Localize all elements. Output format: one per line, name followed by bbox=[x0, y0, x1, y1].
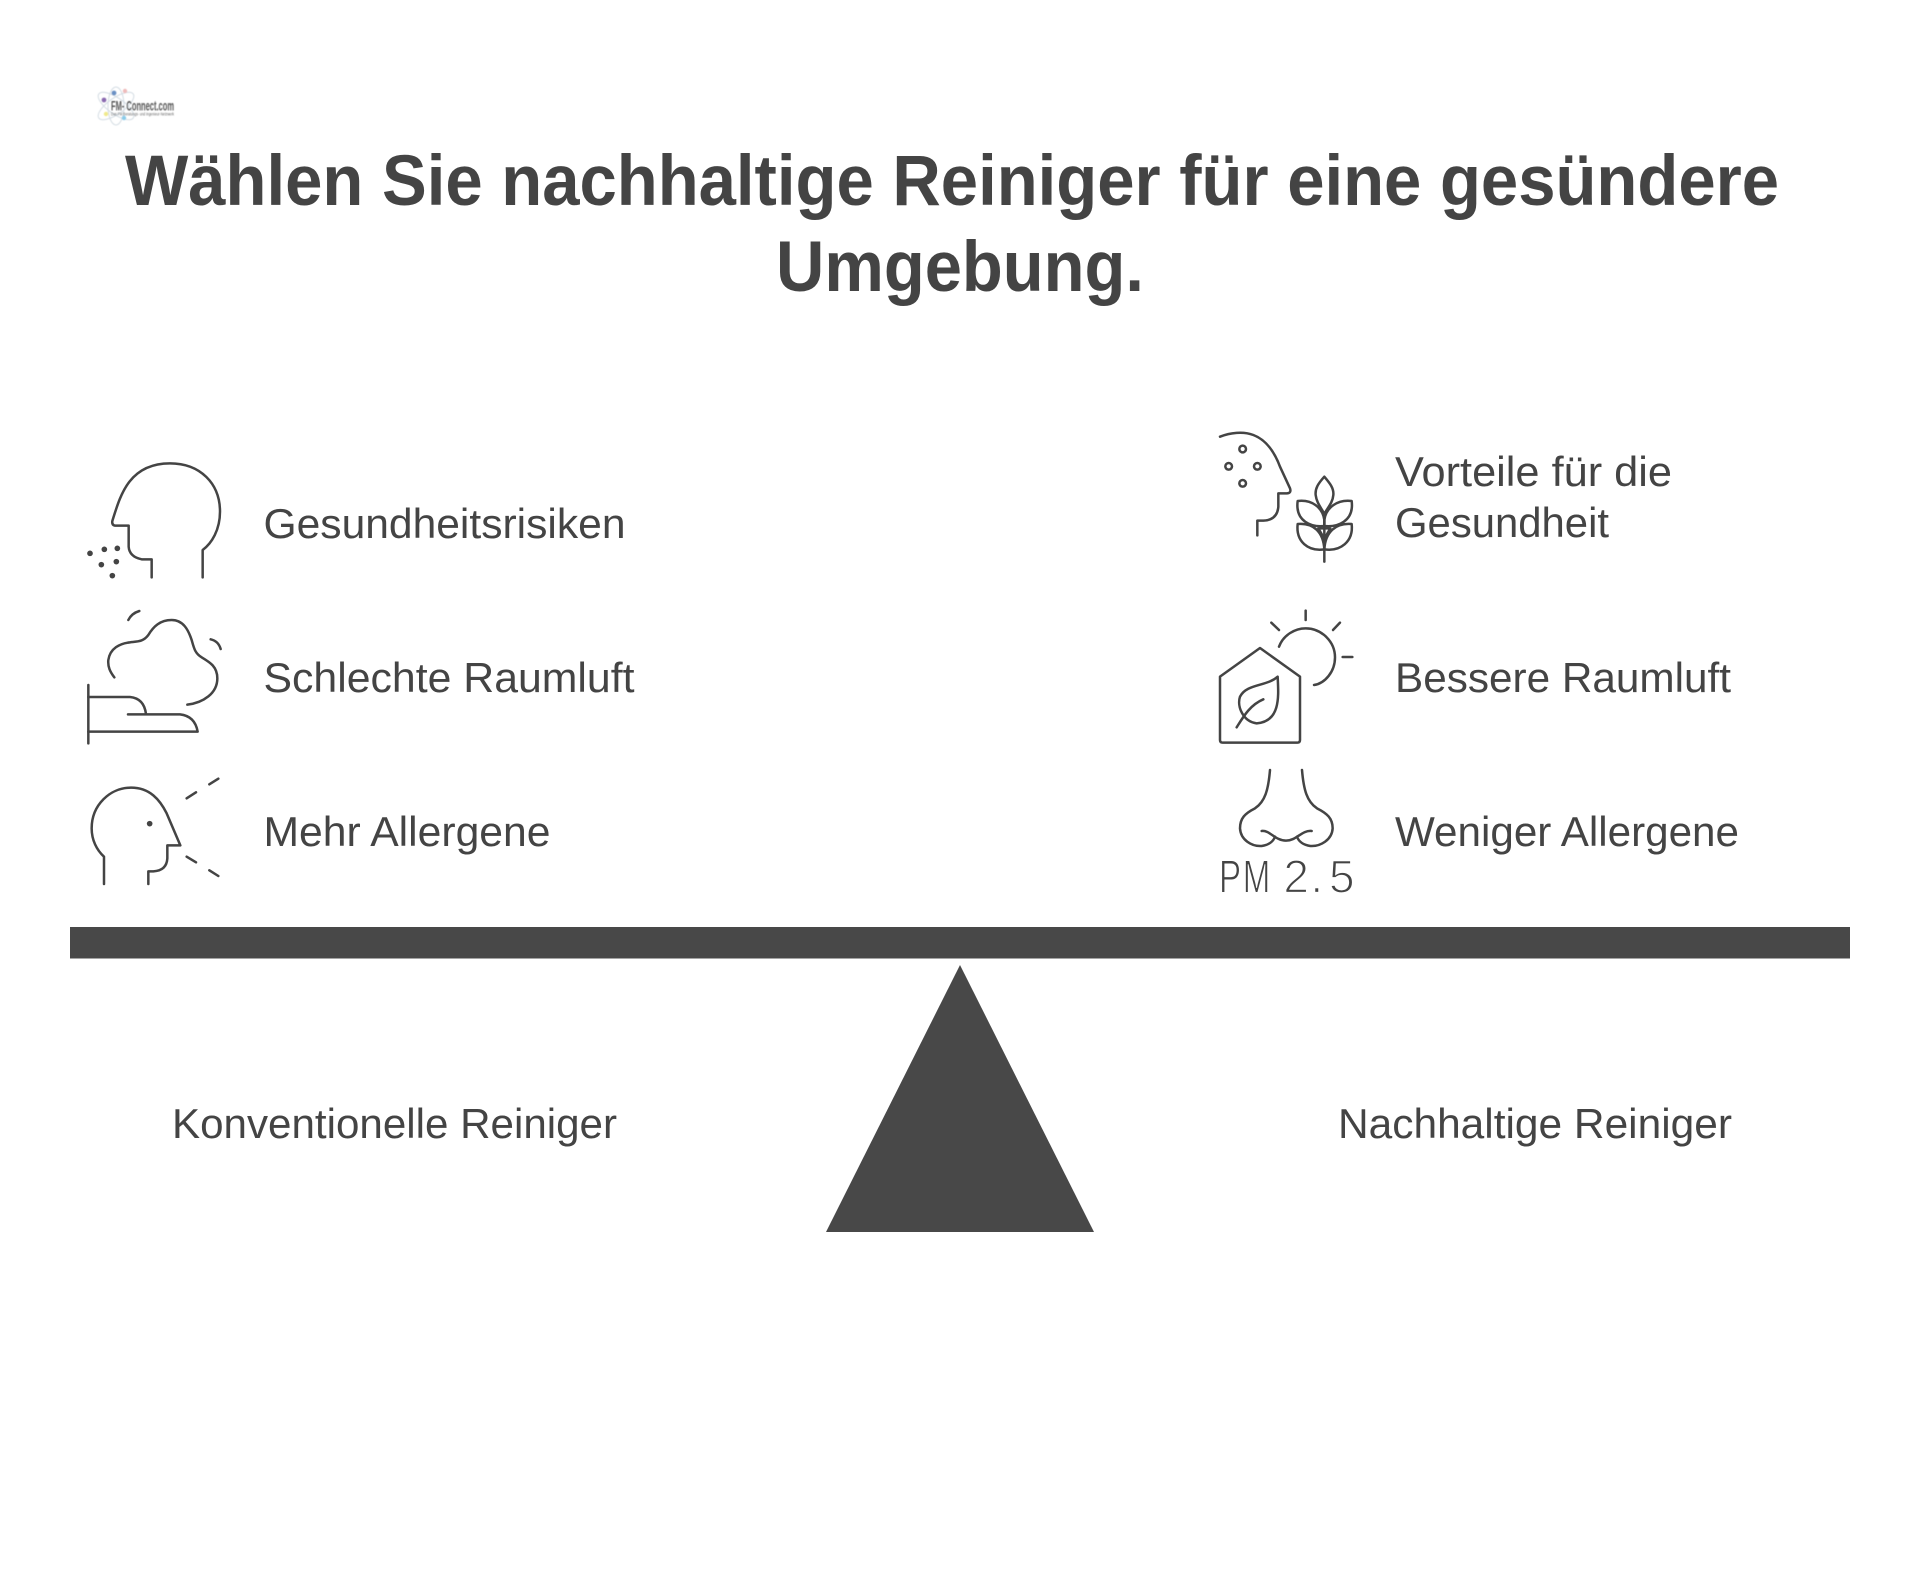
logo: FM-Connect: Das FM Beratungs- und Ingenieur-Netzwerk bbox=[111, 112, 174, 116]
label: Nachhaltige Reiniger: Nachhaltige Reiniger bbox=[1338, 1100, 1732, 1147]
label: Gesundheitsrisiken: Gesundheitsrisiken bbox=[264, 500, 626, 547]
icon: head with allergens bbox=[92, 779, 218, 884]
logo: FM-Connect bbox=[94, 87, 174, 125]
label: Vorteile für die Gesundheit: Vorteile für die bbox=[1395, 448, 1672, 495]
title bbox=[125, 142, 1779, 307]
label: Schlechte Raumluft: Schlechte Raumluft bbox=[264, 654, 635, 701]
title: Wählen Sie nachhaltige Reiniger für eine gesündere bbox=[125, 142, 1779, 221]
seesaw fulcrum triangle bbox=[826, 965, 1094, 1232]
seesaw beam bbox=[70, 927, 1850, 958]
icon: head with wheat bbox=[1220, 433, 1352, 562]
icon: head with particles bbox=[87, 463, 220, 578]
label: Konventionelle Reiniger: Konventionelle Reiniger bbox=[172, 1100, 617, 1147]
label: Weniger Allergene: Weniger Allergene bbox=[1395, 808, 1739, 855]
label: Vorteile für die Gesundheit bbox=[1395, 448, 1672, 546]
icon: nose with PM 2.5: 2.5 bbox=[1283, 851, 1355, 903]
icon: nose with PM 2.5 bbox=[1219, 770, 1355, 903]
logo: FM-Connect: FM- Connect.com bbox=[111, 98, 174, 114]
label: Mehr Allergene: Mehr Allergene bbox=[264, 808, 550, 855]
label: Bessere Raumluft: Bessere Raumluft bbox=[1395, 654, 1731, 701]
icon: nose with PM 2.5: PM bbox=[1219, 852, 1270, 903]
title: Umgebung. bbox=[776, 228, 1144, 307]
label: Vorteile für die Gesundheit: Gesundheit bbox=[1395, 499, 1609, 546]
icon: bed with cloud bbox=[88, 611, 221, 743]
icon: house with leaf and sun bbox=[1220, 611, 1352, 743]
